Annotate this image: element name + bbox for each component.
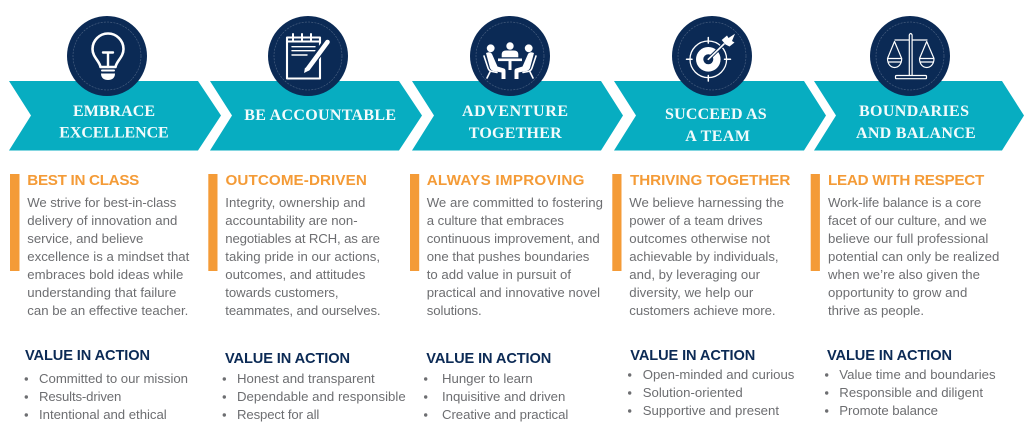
description: practical and innovative novel (427, 285, 600, 300)
description: power of a team drives (629, 213, 763, 228)
bullet list: Responsible and diligent (839, 385, 983, 400)
value in action heading: VALUE IN ACTION (25, 348, 150, 364)
description: when we’re also given the (827, 267, 980, 282)
value in action heading: VALUE IN ACTION (225, 351, 350, 367)
heading: OUTCOME-DRIVEN (226, 172, 367, 189)
chevron (210, 81, 422, 150)
description: diversity, we help our (629, 285, 754, 300)
description: accountability are non- (225, 213, 358, 228)
bullet list: Value time and boundaries (839, 367, 996, 382)
panel: outcome-driven (208, 172, 406, 422)
value in action heading: VALUE IN ACTION (827, 348, 952, 364)
description: negotiables at RCH, as are (225, 231, 380, 246)
description: and, by leveraging our (629, 267, 761, 282)
accent bar (208, 174, 218, 271)
description: Integrity, ownership and (225, 195, 365, 210)
description: understanding that failure (27, 285, 176, 300)
description: one that pushes boundaries (427, 249, 590, 264)
banner title (665, 106, 767, 145)
bullet list: Dependable and responsible (237, 389, 406, 404)
icon: balance scales (870, 16, 950, 96)
description: outcomes, and attitudes (225, 267, 366, 282)
description: thrive as people. (828, 303, 924, 318)
description: a culture that embraces (427, 213, 564, 228)
description (629, 195, 784, 318)
bullet list: Intentional and ethical (39, 407, 167, 422)
description: opportunity to grow and (828, 285, 967, 300)
description: potential can only be realized (828, 249, 999, 264)
description: facet of our culture, and we (828, 213, 987, 228)
description: solutions. (427, 303, 482, 318)
description (827, 195, 999, 318)
description: can be an effective teacher. (27, 303, 188, 318)
description: We strive for best-in-class (27, 195, 177, 210)
banner title: AND BALANCE (856, 125, 976, 142)
banner: boundaries and balance (814, 81, 1024, 150)
panel: thriving together (612, 172, 795, 418)
bullet list: Respect for all (237, 407, 319, 422)
bullet list: Results-driven (39, 389, 121, 404)
bullet list (25, 371, 188, 422)
bullet list: Creative and practical (442, 407, 568, 422)
banner title: TOGETHER (469, 125, 562, 142)
bullet list (825, 367, 996, 418)
description: customers achieve more. (629, 303, 776, 318)
banner title: EXCELLENCE (59, 125, 169, 142)
bullet list (628, 367, 795, 418)
banner: succeed as a team (614, 81, 826, 150)
panel: always improving (410, 172, 603, 422)
value in action heading: VALUE IN ACTION (630, 348, 755, 364)
description (225, 195, 381, 318)
description: continuous improvement, and (427, 231, 600, 246)
accent bar (612, 174, 622, 271)
banner: embrace excellence (9, 81, 221, 150)
banner title: A TEAM (685, 128, 750, 145)
chevron (614, 81, 826, 150)
description: Work-life balance is a core (828, 195, 981, 210)
description: taking pride in our actions, (225, 249, 380, 264)
bullet list: Inquisitive and driven (442, 389, 565, 404)
description: service, and believe (27, 231, 143, 246)
banner title: BOUNDARIES (859, 103, 969, 120)
description (427, 195, 603, 318)
heading: ALWAYS IMPROVING (427, 172, 584, 189)
banner title (856, 103, 976, 142)
icon: team meeting (470, 16, 550, 96)
accent bar (410, 174, 419, 271)
chevron (9, 81, 221, 150)
bullet list: Honest and transparent (237, 371, 375, 386)
description: We believe harnessing the (629, 195, 784, 210)
banner title (462, 103, 568, 142)
description: achievable by individuals, (629, 249, 779, 264)
icon: notepad and pencil (268, 16, 348, 96)
bullet list (424, 371, 568, 422)
description: towards customers, (225, 285, 339, 300)
banner title: ADVENTURE (462, 103, 568, 120)
description: excellence is a mindset that (27, 249, 190, 264)
description (27, 195, 190, 318)
description: delivery of innovation and (27, 213, 177, 228)
banner title: SUCCEED AS (665, 106, 767, 123)
banner: adventure together (412, 81, 623, 150)
banner title: BE ACCOUNTABLE (244, 107, 396, 124)
description: embraces bold ideas while (27, 267, 183, 282)
banner: be accountable (210, 81, 422, 150)
bullet list (223, 371, 406, 422)
banner title: EMBRACE (73, 103, 155, 120)
description: to add value in pursuit of (427, 267, 571, 282)
bullet list: Supportive and present (643, 403, 779, 418)
heading: LEAD WITH RESPECT (828, 172, 985, 189)
bullet list: Promote balance (839, 403, 938, 418)
chevron (814, 81, 1024, 150)
description: outcomes otherwise not (629, 231, 770, 246)
chevron (412, 81, 623, 150)
panel: lead with respect (811, 172, 999, 418)
panel: best in class (10, 172, 190, 422)
description: teammates, and ourselves. (225, 303, 381, 318)
accent bar (811, 174, 820, 271)
heading: BEST IN CLASS (27, 172, 139, 189)
accent bar (10, 174, 20, 271)
icon: target and arrow (672, 16, 752, 96)
description: We are committed to fostering (427, 195, 603, 210)
bullet list: Open-minded and curious (643, 367, 795, 382)
icon: light bulb (67, 16, 147, 96)
banner title (59, 103, 169, 142)
value in action heading: VALUE IN ACTION (426, 351, 551, 367)
bullet list: Solution-oriented (643, 385, 743, 400)
heading: THRIVING TOGETHER (630, 172, 790, 189)
bullet list: Hunger to learn (442, 371, 533, 386)
bullet list: Committed to our mission (39, 371, 188, 386)
description: believe our full professional (828, 231, 988, 246)
